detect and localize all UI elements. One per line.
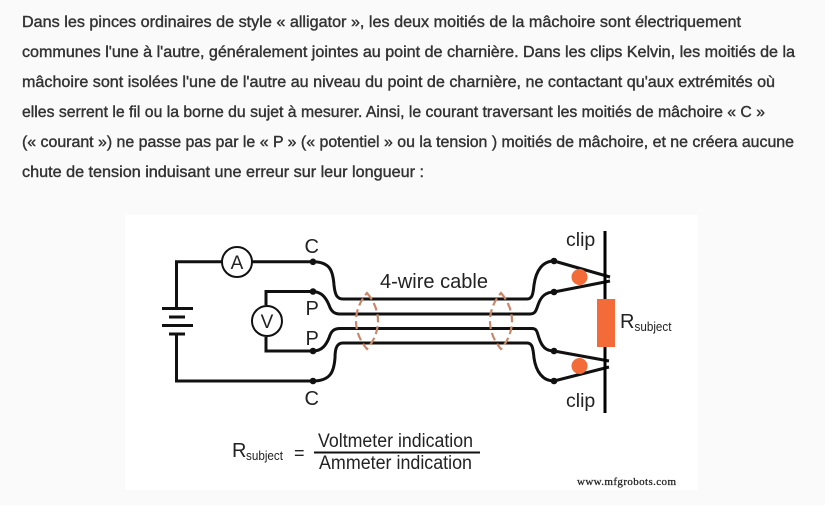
labels [304,229,672,412]
labels: clip [566,229,595,251]
labels: C [304,388,319,410]
formula [232,431,480,474]
subject resistor [597,299,615,347]
labels: 4-wire cable [380,270,488,293]
labels: P [306,328,319,350]
formula: R [232,440,246,462]
voltmeter: V [261,312,274,333]
labels: C [304,236,319,258]
battery [162,262,193,381]
voltmeter [252,306,282,336]
cable bundle ellipses [356,293,512,349]
watermark: www.mfgrobots.com [577,476,676,488]
four-wire cable [175,261,554,381]
text block: explanatory paragraph: (« courant ») ne passe pas par le « P » (« potentiel » ou la tension ) moitiés de mâchoire, et ne créera aucune [22,134,794,151]
text block: explanatory paragraph [22,14,795,181]
text block: explanatory paragraph: communes l'une à l'autre, généralement jointes au point de charnière. Dans les clips Kelvin, les moitiés de la [22,44,795,61]
labels: clip [566,390,595,412]
labels: subject [634,319,672,334]
text block: explanatory paragraph: elles serrent le fil ou la borne du sujet à mesurer. Ainsi, le courant traversant les moitiés de mâchoire « C » [22,104,765,121]
text block: explanatory paragraph: chute de tension induisant une erreur sur leur longueur : [22,164,424,181]
panel: Kelvin clip circuit diagram [125,215,698,490]
labels: R [620,311,634,333]
ammeter: A [231,253,244,274]
formula: Ammeter indication [319,453,472,474]
subject conductor [604,231,606,413]
text block: explanatory paragraph: Dans les pinces ordinaires de style « alligator », les deux moitiés de la mâchoire sont électriquement [22,14,742,31]
ammeter [222,247,252,277]
clip jaws [554,261,610,381]
formula: Voltmeter indication [318,431,473,452]
labels: P [306,298,319,320]
connection nodes [310,258,557,384]
formula: subject [246,448,283,463]
text block: explanatory paragraph: mâchoire sont isolées l'une de l'autre au niveau du point de charnière, ne contactant qu'aux extrémités où [22,74,775,91]
formula: = [294,443,305,463]
